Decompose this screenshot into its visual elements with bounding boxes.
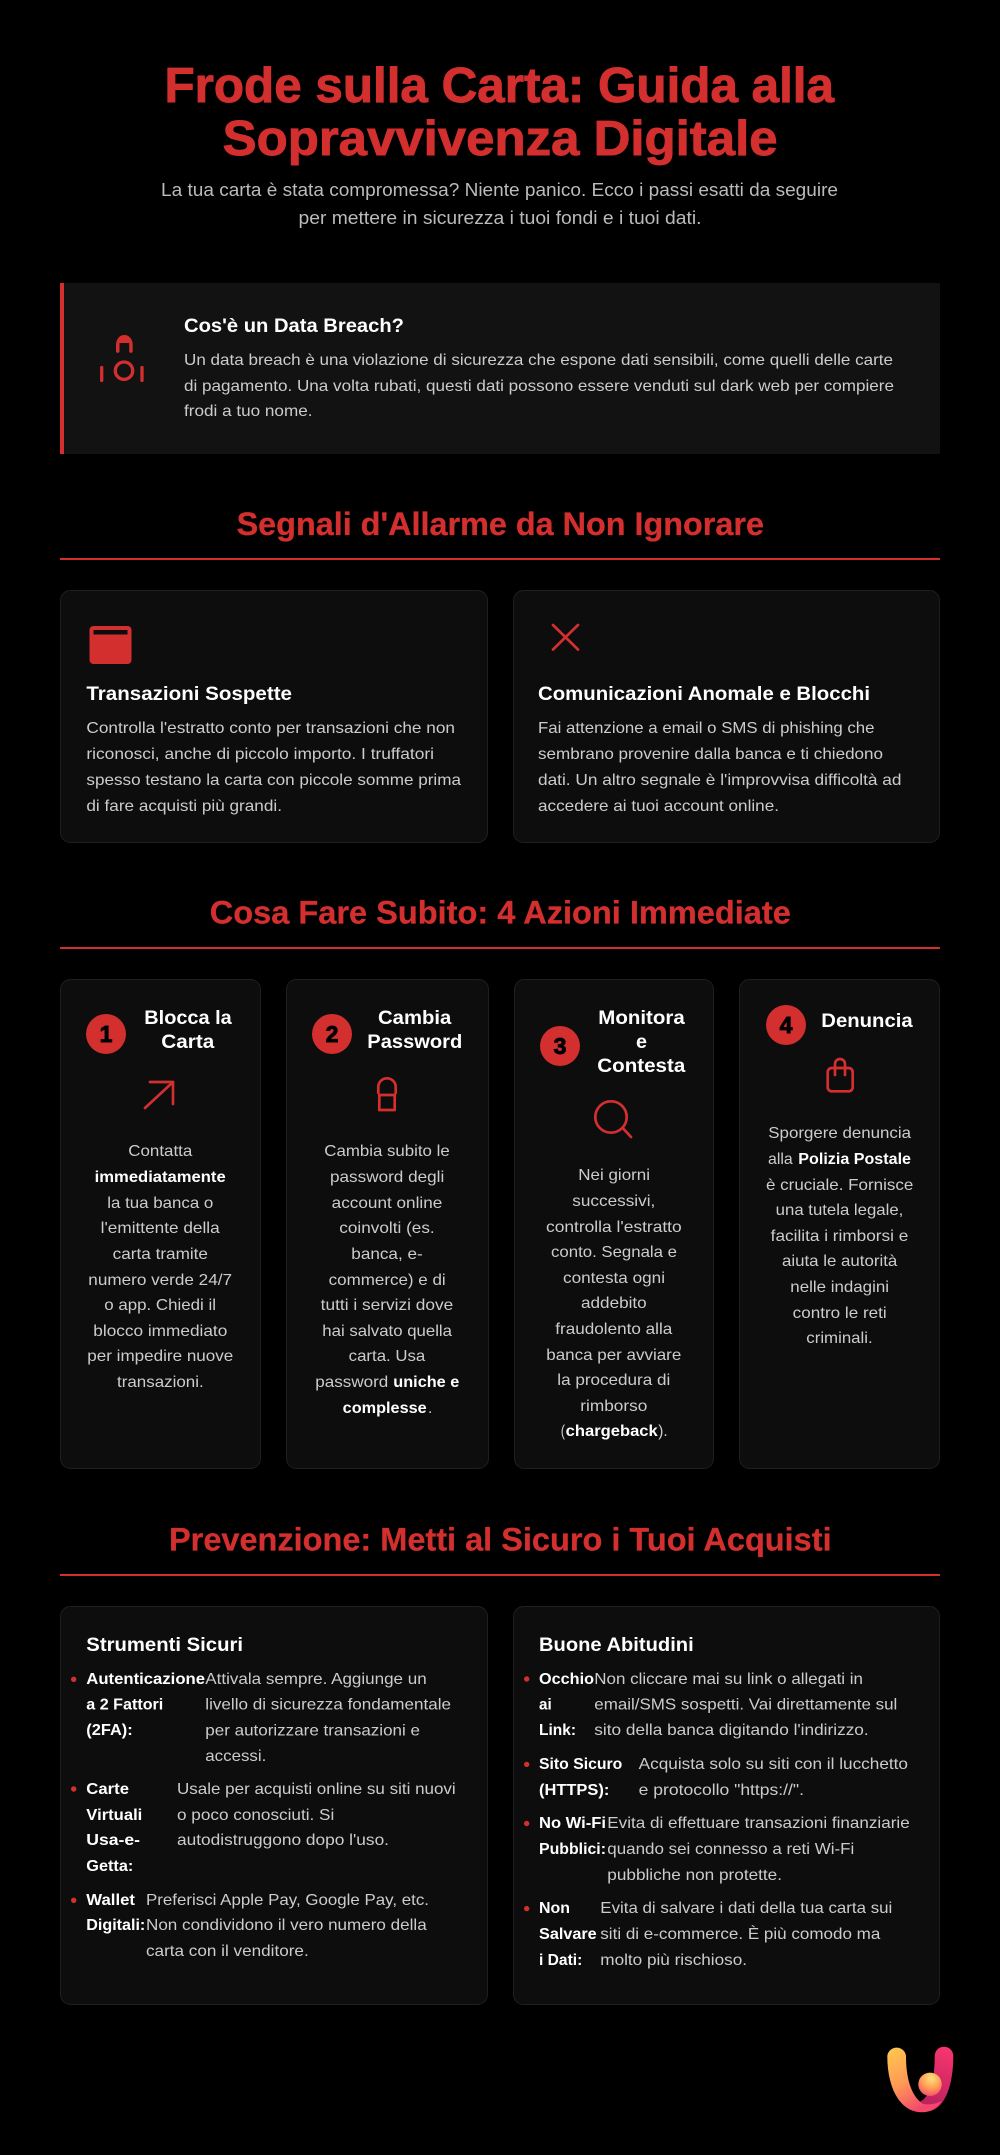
list item: two factor authentication: a 2 Fattori (86, 1696, 163, 1714)
list item: watch the links: sito della banca digitando l'indirizzo. (594, 1722, 869, 1739)
step body text (315, 1143, 460, 1417)
list item: two factor authentication: accessi. (205, 1748, 266, 1765)
list item: two factor authentication (71, 1671, 451, 1765)
step body text: l'emittente della (101, 1220, 220, 1237)
step heading: Cambia (378, 1007, 452, 1029)
step body text: tutti i servizi dove (321, 1297, 453, 1314)
step body text: alla (768, 1151, 793, 1168)
step body text: Nei giorni (578, 1167, 650, 1184)
step body text: contesta ogni (563, 1270, 665, 1287)
list item: virtual cards: autodistruggono dopo l'uso. (177, 1832, 389, 1849)
step body text: Contatta (128, 1143, 193, 1160)
title: Sopravvivenza Digitale (223, 112, 778, 166)
step body text: password degli (330, 1169, 444, 1186)
list item: digital wallets: Digitali: (86, 1917, 145, 1934)
step body text: blocco immediato (93, 1323, 228, 1340)
step body text (87, 1143, 233, 1391)
step body text: immediatamente (95, 1169, 226, 1186)
step body text: banca, e- (351, 1246, 423, 1263)
step body text: Sporgere denuncia (768, 1125, 911, 1142)
step body text: controlla l'estratto (546, 1219, 682, 1236)
step body text (546, 1167, 682, 1440)
list item: two factor authentication: (2FA): (86, 1722, 133, 1739)
number badge 2 (312, 1014, 352, 1054)
step body text: ( (561, 1423, 566, 1440)
list item: watch the links: Link: (539, 1722, 576, 1739)
step heading: Password (367, 1031, 462, 1053)
list item: watch the links: Occhio (539, 1671, 594, 1688)
panel: step 4 (740, 980, 940, 1468)
step body text: Cambia subito le (324, 1143, 450, 1160)
step body text: la procedura di (557, 1372, 670, 1389)
step heading: Carta (161, 1031, 215, 1053)
step body text: successivi, (572, 1193, 655, 1210)
list item: two factor authentication: per autorizzare transazioni e (205, 1722, 420, 1740)
card body text (538, 720, 902, 815)
list item: watch the links: Non cliccare mai su link o allegati in (594, 1671, 863, 1688)
list item: virtual cards: o poco conosciuti. Si (177, 1807, 334, 1824)
card body text: accedere ai tuoi account online. (538, 798, 779, 815)
panel: safe tools (60, 1606, 488, 2004)
icon: bag (828, 1059, 853, 1091)
icon: card (90, 626, 132, 664)
panel: step 3 (514, 980, 714, 1468)
step heading: Blocca la (144, 1007, 233, 1029)
step body text: account online (332, 1195, 442, 1212)
step body text: ). (658, 1423, 668, 1440)
list item: secure site (524, 1756, 908, 1799)
list item: do not save data: siti di e-commerce. È più comodo ma (600, 1924, 881, 1943)
number badge 1 (86, 1014, 126, 1054)
logo (887, 2047, 953, 2112)
list item: secure site: Sito Sicuro (539, 1756, 622, 1773)
card body text: riconosci, anche di piccolo importo. I truffatori (86, 746, 434, 763)
step body text: transazioni. (117, 1374, 204, 1391)
card body text: spesso testano la carta con piccole somme prima (86, 772, 461, 789)
list item: do not save data (524, 1900, 892, 1969)
list item: do not save data: Evita di salvare i dati della tua carta sui (600, 1900, 892, 1917)
panel: data breach definition (60, 283, 940, 454)
list item: digital wallets: carta con il venditore. (146, 1943, 309, 1960)
list item: no public wifi: pubbliche non protette. (607, 1867, 782, 1884)
title (164, 59, 835, 166)
list item: no public wifi: Pubblici: (539, 1841, 606, 1858)
panel body text: Un data breach è una violazione di sicurezza che espone dati sensibili, come quelli delle carte (184, 352, 893, 369)
step body text: complesse (343, 1400, 427, 1417)
card body text: Fai attenzione a email o SMS di phishing che (538, 720, 874, 737)
list item: do not save data: i Dati: (539, 1952, 582, 1969)
icon: magnifier (595, 1101, 631, 1137)
step heading: e (636, 1031, 647, 1053)
list item: digital wallets: Non condividono il vero numero della (146, 1917, 427, 1934)
step body text: commerce) e di (329, 1272, 446, 1289)
number badge 4 (766, 1005, 806, 1045)
card body text (86, 720, 461, 815)
step body text: per impedire nuove (87, 1348, 233, 1365)
step body text: contro le reti (793, 1305, 887, 1322)
number badge 3: 3 (554, 1033, 566, 1059)
panel: anomalous communications (514, 590, 940, 842)
list item: two factor authentication: Attivala sempre. Aggiunge un (205, 1671, 427, 1688)
list item: digital wallets: Wallet (86, 1892, 135, 1909)
section heading: immediate actions: Cosa Fare Subito: 4 Azioni Immediate (210, 895, 791, 931)
list item: watch the links: ai (539, 1696, 552, 1714)
list item: secure site: (HTTPS): (539, 1782, 609, 1799)
step body text: numero verde 24/7 (88, 1272, 232, 1289)
number badge 4: 4 (780, 1012, 793, 1038)
step heading (144, 1007, 233, 1053)
list item: digital wallets: Preferisci Apple Pay, Google Pay, etc. (146, 1892, 429, 1909)
list item: virtual cards: Usa-e- (86, 1832, 140, 1849)
card body text: sembrano provenire dalla banca e ti chiedono (538, 746, 883, 763)
panel body text: frodi a tuo nome. (184, 403, 312, 420)
panel: good habits (514, 1606, 940, 2004)
subtitle: per mettere in sicurezza i tuoi fondi e i tuoi dati. (298, 208, 702, 228)
card heading: Transazioni Sospette (86, 683, 292, 705)
list item: no public wifi: quando sei connesso a reti Wi-Fi (607, 1841, 854, 1858)
subtitle: La tua carta è stata compromessa? Niente panico. Ecco i passi esatti da seguire (161, 180, 838, 200)
step body text: o app. Chiedi il (104, 1297, 216, 1314)
panel heading: Buone Abitudini (539, 1634, 694, 1656)
list item: no public wifi: No Wi-Fi (539, 1815, 606, 1832)
step body text: conto. Segnala e (551, 1244, 677, 1261)
number badge 1: 1 (100, 1021, 113, 1047)
subtitle (161, 180, 838, 228)
list item: virtual cards: Carte (86, 1781, 129, 1798)
list item: watch the links: email/SMS sospetti. Vai direttamente sul (594, 1696, 897, 1714)
step body text: addebito (581, 1295, 647, 1312)
section heading: warning signs: Segnali d'Allarme da Non Ignorare (237, 506, 764, 542)
list item: virtual cards: Usale per acquisti online su siti nuovi (177, 1781, 456, 1798)
list item: secure site: e protocollo "https://". (639, 1782, 804, 1799)
step heading (597, 1007, 686, 1077)
panel heading: Strumenti Sicuri (86, 1634, 243, 1656)
list item: virtual cards: Getta: (86, 1858, 133, 1875)
icon: arrow (145, 1082, 173, 1108)
step body text: facilita i rimborsi e (771, 1228, 908, 1245)
step body text: carta. Usa (349, 1348, 426, 1365)
step heading: Monitora (598, 1007, 686, 1029)
number badge 3 (540, 1026, 580, 1066)
step body text: hai salvato quella (322, 1323, 452, 1340)
list item: digital wallets (71, 1892, 429, 1960)
step body text: la tua banca o (107, 1195, 214, 1212)
step body text: . (428, 1400, 432, 1417)
step body text: rimborso (580, 1398, 648, 1415)
card body text: Controlla l'estratto conto per transazioni che non (86, 720, 455, 737)
step body text: è cruciale. Fornisce (766, 1177, 913, 1194)
panel body text (184, 352, 894, 420)
step body text: una tutela legale, (776, 1202, 903, 1219)
step body text: uniche e (393, 1374, 460, 1391)
list item: do not save data: Non (539, 1900, 570, 1917)
list item: secure site: Acquista solo su siti con il lucchetto (639, 1756, 908, 1773)
list item: do not save data: molto più rischioso. (600, 1952, 747, 1969)
step body text: fraudolento alla (555, 1321, 673, 1338)
card body text: di fare acquisti più grandi. (86, 798, 282, 815)
list item: virtual cards: Virtuali (86, 1807, 142, 1824)
section heading: prevention: Prevenzione: Metti al Sicuro i Tuoi Acquisti (169, 1522, 832, 1558)
list item: two factor authentication: Autenticazione (86, 1671, 205, 1688)
icon: cross (553, 625, 578, 650)
list item: no public wifi (524, 1815, 910, 1884)
step body text: coinvolti (es. (339, 1220, 435, 1237)
panel: step 1 (60, 980, 260, 1468)
step body text: criminali. (806, 1330, 873, 1347)
step body text: Polizia Postale (798, 1151, 911, 1168)
step body text: chargeback (566, 1423, 658, 1440)
step body text (766, 1125, 913, 1347)
list item: virtual cards (71, 1781, 456, 1875)
card body text: dati. Un altro segnale è l'improvvisa difficoltà ad (538, 772, 902, 789)
list item: watch the links (524, 1671, 897, 1739)
step heading: Denuncia (821, 1010, 914, 1032)
step body text: password (315, 1374, 388, 1391)
step body text: nelle indagini (790, 1279, 889, 1296)
panel: step 2 (286, 980, 488, 1468)
step heading (367, 1007, 462, 1053)
panel: suspicious transactions (60, 590, 488, 842)
title: Frode sulla Carta: Guida alla (164, 59, 835, 113)
panel heading: Cos'è un Data Breach? (184, 315, 404, 337)
list item: no public wifi: Evita di effettuare transazioni finanziarie (607, 1815, 910, 1832)
icon: data breach (102, 335, 142, 380)
step body text: aiuta le autorità (782, 1253, 898, 1270)
step heading: Contesta (597, 1055, 686, 1077)
step body text: carta tramite (113, 1246, 208, 1263)
step body text: banca per avviare (546, 1347, 681, 1364)
card heading: Comunicazioni Anomale e Blocchi (538, 683, 870, 705)
icon: lock (378, 1078, 396, 1110)
list item: two factor authentication: livello di sicurezza fondamentale (205, 1696, 451, 1714)
panel body text: di pagamento. Una volta rubati, questi dati possono essere venduti sul dark web per compiere (184, 378, 894, 395)
list item: do not save data: Salvare (539, 1926, 597, 1943)
number badge 2: 2 (326, 1021, 338, 1047)
